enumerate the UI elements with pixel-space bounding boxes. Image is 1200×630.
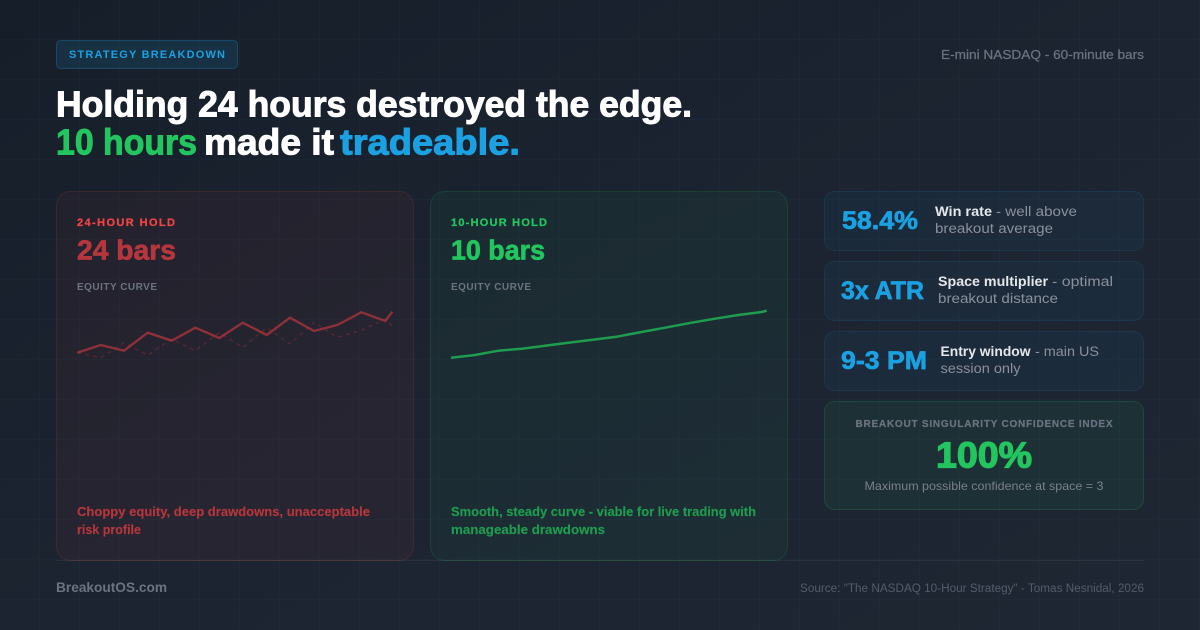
- callout: confidence index: 100%: [936, 435, 1032, 476]
- line chart: smooth equity curve: [451, 311, 767, 358]
- stat card: win rate: 58.4%: [842, 207, 918, 235]
- stat card: entry window: [824, 332, 1144, 390]
- footer source: Source: "The NASDAQ 10-Hour Strategy" - Tomas Nesnidal, 2026: [800, 583, 1144, 595]
- verdict text: Choppy equity, deep drawdowns, unacceptable: [77, 504, 370, 519]
- panel label: 24-hour hold: 24-HOUR HOLD: [77, 217, 175, 229]
- verdict text: [77, 504, 370, 537]
- stat card: space multiplier: [824, 262, 1144, 320]
- title: [56, 84, 692, 163]
- panel: 24-hour hold: [56, 192, 414, 560]
- title: tradeable.: [340, 122, 520, 163]
- callout: confidence index: [824, 402, 1144, 510]
- chart label: EQUITY CURVE: [77, 282, 157, 293]
- verdict text: [451, 504, 756, 537]
- line chart: choppy equity curve: [77, 312, 392, 358]
- panel: 10-hour hold: [430, 192, 788, 560]
- stat card: win rate: Win rate: [935, 204, 993, 219]
- stat card: space multiplier: breakout distance: [938, 291, 1058, 306]
- instrument label: E-mini NASDAQ - 60-minute bars: [941, 48, 1144, 62]
- stat card: space multiplier: 3x ATR: [841, 277, 924, 305]
- stat card: entry window: - main US: [1035, 344, 1099, 359]
- metric: 10 bars: 10 bars: [451, 234, 545, 266]
- chart label: EQUITY CURVE: [451, 282, 531, 293]
- badge: strategy breakdown: [56, 40, 238, 68]
- title: Holding 24 hours destroyed the edge.: [56, 84, 692, 124]
- verdict text: manageable drawdowns: [451, 522, 605, 537]
- callout: confidence index: BREAKOUT SINGULARITY CONFIDENCE INDEX: [856, 419, 1113, 430]
- footer rule and text: [56, 560, 1144, 595]
- verdict text: Smooth, steady curve - viable for live trading with: [451, 504, 756, 519]
- footer brand: BreakoutOS.com: [56, 580, 167, 595]
- stat card: win rate: - well above: [996, 204, 1077, 219]
- stat card: entry window: Entry window: [940, 344, 1031, 359]
- stat card: win rate: [824, 192, 1144, 250]
- title: 10 hours: [56, 122, 197, 163]
- title: made it: [204, 122, 334, 163]
- verdict text: risk profile: [77, 522, 141, 537]
- stat card: space multiplier: - optimal: [1052, 274, 1113, 289]
- stat card: entry window: session only: [940, 361, 1021, 376]
- metric: 24 bars: 24 bars: [77, 234, 176, 266]
- badge: strategy breakdown: STRATEGY BREAKDOWN: [69, 49, 225, 61]
- stat card: space multiplier: Space multiplier: [938, 274, 1049, 289]
- callout: confidence index: Maximum possible confidence at space = 3: [864, 479, 1104, 493]
- panel label: 10-hour hold: 10-HOUR HOLD: [451, 217, 547, 229]
- stat card: entry window: 9-3 PM: [841, 347, 927, 375]
- stat card: win rate: breakout average: [935, 221, 1053, 236]
